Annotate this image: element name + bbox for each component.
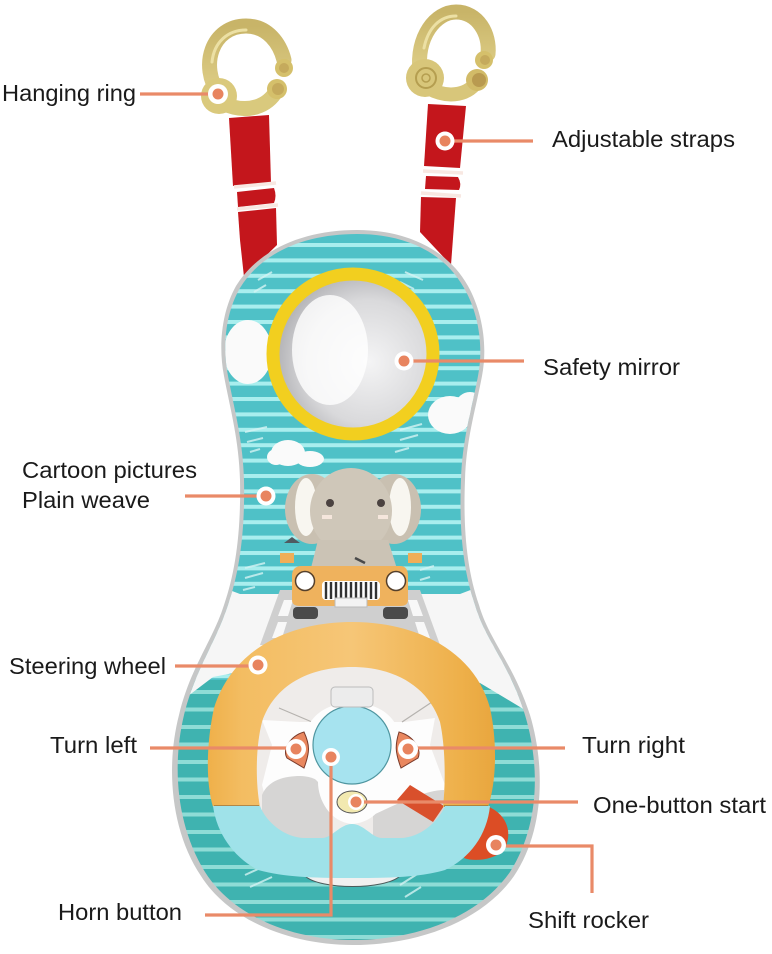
wheel hub [255, 664, 448, 840]
right strap [420, 104, 466, 265]
top switch [331, 687, 373, 707]
elephant on car [280, 468, 422, 619]
orange rim [208, 622, 495, 807]
label: plain weave: Plain weave [22, 487, 150, 513]
car [280, 553, 422, 563]
label: one-button start: One-button start [593, 792, 767, 818]
panel: fabric backing [172, 230, 540, 945]
clouds [224, 320, 272, 384]
left hanging ring [201, 26, 293, 114]
turn buttons [286, 732, 308, 768]
label: cartoon pictures: Cartoon pictures [22, 457, 197, 483]
label: turn left: Turn left [50, 732, 138, 758]
label: turn right: Turn right [582, 732, 686, 758]
callout lines [140, 94, 592, 915]
left strap [229, 115, 278, 277]
road [190, 590, 523, 709]
label: hanging ring: Hanging ring [2, 80, 136, 106]
steering wheel [208, 622, 495, 886]
safety mirror [273, 274, 433, 434]
start button [337, 791, 367, 813]
label: steering wheel: Steering wheel [9, 653, 166, 679]
shift rocker [464, 805, 508, 860]
callout dots [208, 84, 506, 855]
faint fabric marks [243, 272, 434, 897]
hub centre [303, 703, 402, 824]
label: safety mirror: Safety mirror [543, 354, 680, 380]
grey panels [262, 776, 331, 840]
label: shift rocker: Shift rocker [528, 907, 649, 933]
label: adjustable straps: Adjustable straps [552, 126, 735, 152]
horn button [313, 706, 391, 784]
label: horn button: Horn button [58, 899, 182, 925]
blue rim [305, 876, 400, 886]
right hanging ring [406, 12, 493, 97]
